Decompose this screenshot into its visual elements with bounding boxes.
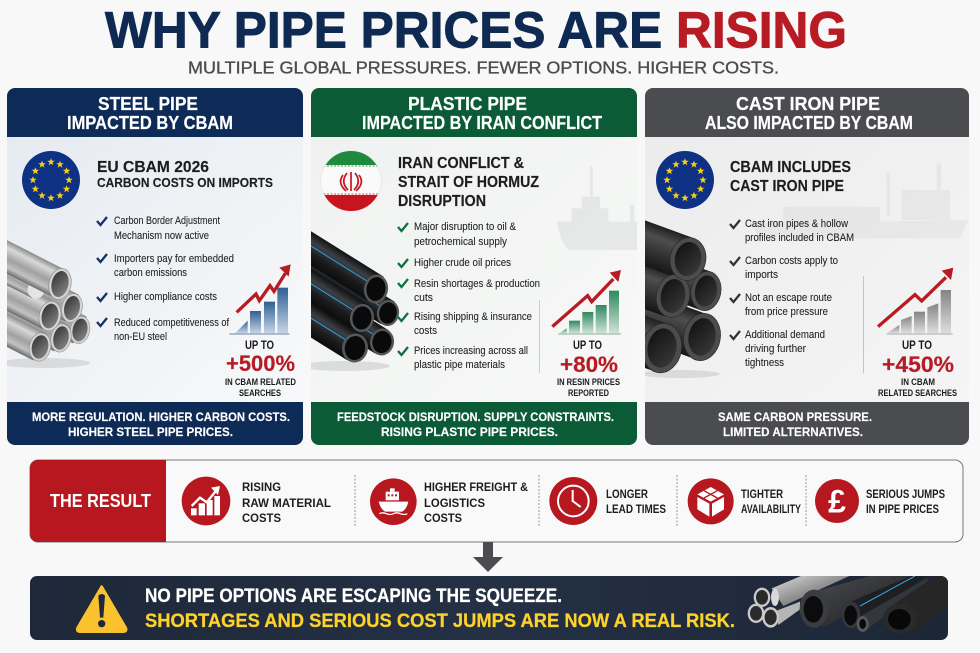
icon: EU flag	[22, 151, 80, 209]
panel background	[7, 137, 303, 402]
header text: ALSO IMPACTED BY CBAM	[705, 113, 913, 133]
header text: PLASTIC PIPE	[408, 94, 527, 114]
banner text	[145, 586, 735, 632]
text: freight and logistics: COSTS	[424, 511, 462, 525]
bullet list: carbon emissions	[114, 267, 188, 279]
bullet list: from price pressure	[745, 306, 828, 318]
text: freight and logistics: HIGHER FREIGHT &	[424, 480, 528, 494]
panel: cast iron pipe	[645, 88, 969, 445]
icon: pound sign	[815, 479, 859, 523]
subtitle: MULTIPLE GLOBAL PRESSURES. FEWER OPTIONS. HIGHER COSTS.	[188, 57, 779, 77]
title: WHY PIPE PRICES ARE RISING	[105, 2, 847, 58]
bullet list: plastic pipe materials	[414, 359, 506, 371]
stat: +500%: IN CBAM RELATED	[225, 377, 296, 388]
heading	[730, 160, 850, 192]
icon: clock	[549, 477, 597, 525]
chart: rising bars and arrow	[552, 270, 621, 335]
text: serious jumps	[866, 487, 945, 516]
banner text: NO PIPE OPTIONS ARE ESCAPING THE SQUEEZE.	[145, 586, 562, 607]
heading: DISRUPTION	[398, 193, 486, 210]
footer text	[338, 412, 614, 436]
footer text: MORE REGULATION. HIGHER CARBON COSTS.	[32, 410, 290, 424]
text: rising raw material costs: RISING	[242, 480, 281, 494]
footer text: FEEDSTOCK DISRUPTION. SUPPLY CONSTRAINTS.	[337, 410, 614, 424]
text: rising raw material costs: COSTS	[242, 511, 281, 525]
heading: STRAIT OF HORMUZ	[398, 174, 539, 191]
text: tighter availability: AVAILABILITY	[741, 502, 801, 516]
plastic pipes illustration	[311, 231, 400, 371]
stat: +80%: UP TO	[573, 340, 602, 352]
bullet list	[398, 221, 540, 371]
stat: +450%: RELATED SEARCHES	[878, 388, 957, 399]
result label block: THE RESULT	[50, 491, 151, 511]
bullet list: cuts	[414, 292, 434, 304]
bullet list: petrochemical supply	[414, 236, 508, 248]
icon: freight ship	[370, 478, 417, 525]
cast iron pipes illustration	[645, 220, 722, 378]
icon: box	[688, 478, 734, 524]
stat: +80%	[557, 340, 620, 399]
stat: +450%: UP TO	[902, 340, 932, 352]
stat: +80%: REPORTED	[568, 388, 609, 399]
header text: CAST IRON PIPE	[736, 94, 880, 114]
icon: EU flag	[656, 151, 714, 209]
icon: Iran flag	[320, 150, 382, 212]
header band	[7, 88, 303, 137]
stat: +80%: +80%	[560, 352, 618, 377]
faint ship	[750, 163, 968, 238]
footer text: HIGHER STEEL PIPE PRICES.	[68, 425, 233, 439]
bullet list: Prices increasing across all	[414, 345, 528, 357]
heading: IRAN CONFLICT &	[398, 155, 524, 172]
bullet list: Importers pay for embedded	[114, 253, 234, 265]
footer band	[311, 402, 637, 445]
panel background	[311, 137, 637, 402]
text: freight and logistics: LOGISTICS	[424, 496, 485, 510]
panel: steel pipe	[0, 88, 303, 445]
bullet list: Not an escape route	[745, 292, 832, 304]
header text	[363, 96, 602, 130]
panel: the result	[30, 460, 963, 542]
footer band	[645, 402, 969, 445]
footer text: LIMITED ALTERNATIVES.	[723, 425, 863, 439]
bullet list: tightness	[745, 357, 785, 369]
bullet list: Mechanism now active	[114, 230, 209, 242]
bullet list: Higher crude oil prices	[414, 257, 512, 269]
bullet list: Cast iron pipes & hollow	[745, 218, 848, 230]
text: longer lead times: LONGER	[606, 487, 648, 501]
heading: CBAM INCLUDES	[730, 159, 851, 176]
bullet list: driving further	[745, 343, 806, 355]
footer text: SAME CARBON PRESSURE.	[718, 410, 872, 424]
bullet list: Resin shortages & production	[414, 278, 540, 290]
stat: +500%	[225, 340, 296, 399]
faint ship	[557, 167, 637, 250]
banner text: SHORTAGES AND SERIOUS COST JUMPS ARE NOW A REAL RISK.	[145, 611, 735, 632]
heading: CAST IRON PIPE	[730, 178, 844, 195]
text: tighter availability: TIGHTER	[741, 487, 783, 501]
text: longer lead times: LEAD TIMES	[606, 502, 666, 516]
header text: IMPACTED BY IRAN CONFLICT	[362, 113, 602, 133]
stat: +500%: +500%	[226, 351, 295, 376]
stat: +450%: +450%	[882, 352, 954, 377]
text: serious jumps: IN PIPE PRICES	[866, 502, 939, 516]
bullet list: costs	[414, 325, 438, 337]
heading: CARBON COSTS ON IMPORTS	[97, 176, 273, 190]
bullet list: Carbon costs apply to	[745, 255, 838, 267]
panel background	[645, 137, 930, 370]
bullet list	[97, 215, 234, 343]
stat: +80%: IN RESIN PRICES	[557, 377, 620, 388]
footer text	[718, 412, 872, 436]
text: longer lead times	[606, 487, 666, 516]
bullet list: profiles included in CBAM	[745, 232, 854, 244]
bullet list: Reduced competitiveness of	[114, 317, 230, 329]
header text: STEEL PIPE	[98, 94, 198, 114]
text: rising raw material costs	[242, 480, 331, 525]
bullet list: Major disruption to oil &	[414, 221, 517, 233]
footer text	[32, 412, 290, 436]
result label block	[30, 460, 166, 542]
stat: +450%	[878, 340, 957, 399]
arrow: down	[473, 542, 503, 572]
footer text: RISING PLASTIC PIPE PRICES.	[381, 425, 558, 439]
stat: +500%: UP TO	[245, 340, 274, 352]
stat: +450%: IN CBAM	[901, 377, 935, 388]
text: rising raw material costs: RAW MATERIAL	[242, 496, 331, 510]
chart: rising bars and arrow	[878, 268, 953, 335]
chart: rising bars and arrow	[229, 264, 291, 335]
banner: conclusion	[30, 575, 950, 640]
header text: IMPACTED BY CBAM	[67, 113, 233, 133]
pipes illustration	[748, 575, 950, 634]
panel: plastic pipe	[311, 88, 637, 445]
header band	[311, 88, 637, 137]
header text	[705, 96, 912, 130]
text: freight and logistics	[424, 480, 528, 525]
bullet list: imports	[745, 269, 779, 281]
bullet list: Higher compliance costs	[114, 291, 218, 303]
header text	[68, 96, 232, 130]
bullet list: Rising shipping & insurance	[414, 311, 532, 323]
text: tighter availability	[741, 487, 801, 516]
icon: rising raw material costs	[182, 477, 230, 525]
heading	[398, 155, 539, 210]
bullet list	[730, 218, 854, 369]
icon: pound sign: £	[828, 484, 846, 520]
text: serious jumps: SERIOUS JUMPS	[866, 487, 945, 501]
header band	[645, 88, 969, 137]
heading: EU CBAM 2026	[97, 159, 209, 176]
icon: warning triangle	[77, 587, 126, 632]
footer band	[7, 402, 303, 445]
bullet list: non-EU steel	[114, 331, 167, 343]
heading	[97, 160, 273, 188]
stat: +500%: SEARCHES	[239, 388, 281, 399]
bullet list: Additional demand	[745, 329, 825, 341]
steel pipes illustration	[7, 240, 90, 368]
bullet list: Carbon Border Adjustment	[114, 215, 220, 227]
